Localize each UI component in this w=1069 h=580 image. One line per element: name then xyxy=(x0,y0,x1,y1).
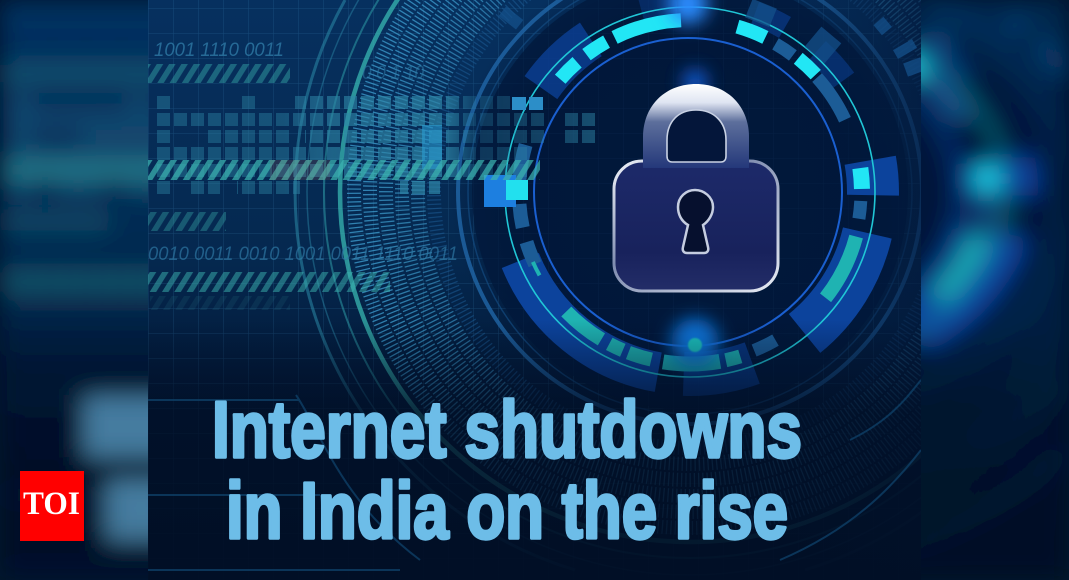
lock body xyxy=(614,161,778,291)
binary text rows xyxy=(148,40,458,265)
title line 2: in India on the rise xyxy=(226,466,788,555)
glow above lock xyxy=(683,70,707,94)
lower arcs xyxy=(148,380,921,570)
data square grid xyxy=(148,95,598,197)
ring segments: blue xyxy=(512,38,1011,356)
background gradient xyxy=(148,0,921,580)
TOI logo xyxy=(20,471,84,541)
lower fade xyxy=(148,320,921,580)
glow bottom xyxy=(671,319,719,367)
keyhole xyxy=(678,190,713,253)
right edge shade xyxy=(798,0,1069,548)
dark core behind rings xyxy=(481,0,1014,300)
teal bottom dot xyxy=(688,338,702,352)
highlighted data squares xyxy=(422,97,543,207)
bottom highlight xyxy=(640,280,752,286)
grid lines xyxy=(148,0,921,580)
binary text rows: 1001 1110 0011 xyxy=(154,40,284,61)
stripe bars xyxy=(148,64,540,310)
ring segments: teal xyxy=(531,216,1002,372)
dark inner disc xyxy=(472,0,908,410)
shackle opening xyxy=(667,110,726,162)
shackle xyxy=(643,84,749,168)
ring segments: cyan xyxy=(555,13,1018,215)
TOI logo: TOI xyxy=(23,486,80,522)
thin inner and outer ring lines xyxy=(505,7,875,377)
outer scattered blocks xyxy=(499,0,925,77)
shackle base highlight xyxy=(677,166,722,170)
binary text rows: 0010 0011 0010 1001 0011 1110 0011 xyxy=(148,244,458,265)
glow top xyxy=(668,0,708,24)
concentric outer rings xyxy=(295,0,1069,575)
dark blue background wedges xyxy=(502,0,1056,396)
padlock icon xyxy=(614,84,778,291)
title line 1: Internet shutdowns xyxy=(212,385,802,474)
binary text rows: 0 0 1 10 xyxy=(362,63,424,84)
title xyxy=(212,385,802,555)
